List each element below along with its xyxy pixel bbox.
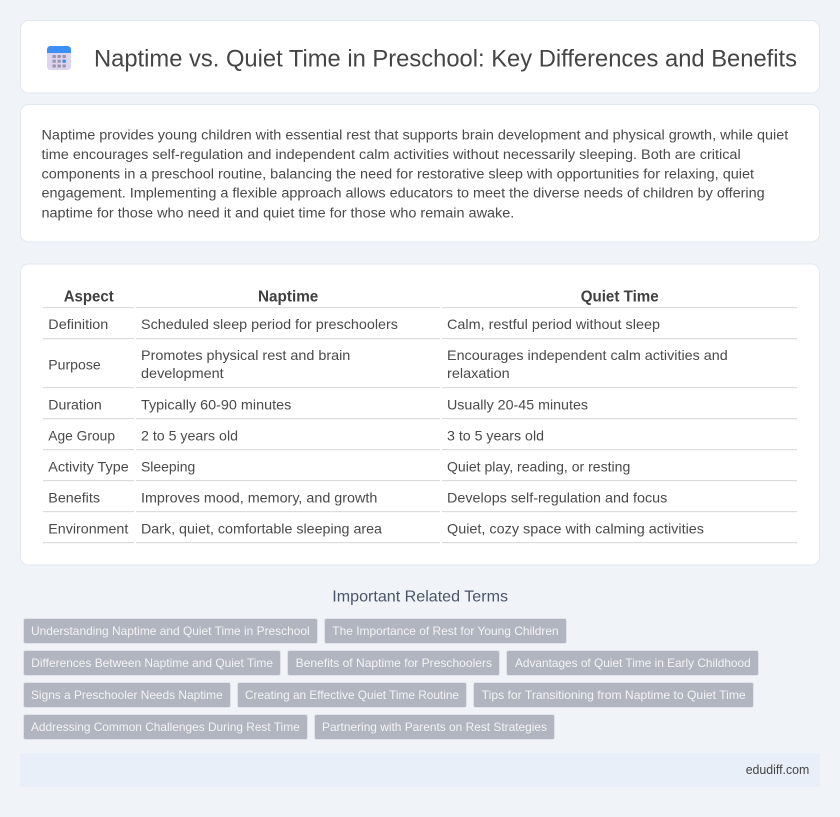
tag: Tips for Transitioning from Naptime to Quiet Time — [482, 688, 746, 702]
heading: important related terms: Important Related Terms — [332, 588, 508, 605]
tag — [314, 714, 554, 740]
panel: title header — [20, 20, 820, 93]
table header row — [43, 289, 797, 308]
table row: benefits — [43, 489, 797, 512]
text block: introduction paragraph: components in a preschool routine, balancing the need for restorative sleep with opportunities for relaxing, quiet — [42, 166, 754, 182]
table row: purpose: development — [141, 365, 224, 381]
tag — [24, 682, 230, 708]
table row: purpose: Promotes physical rest and brain — [141, 347, 350, 363]
table row: benefits: Benefits — [48, 489, 100, 505]
table header row: Aspect — [64, 289, 114, 306]
table row: definition: Scheduled sleep period for preschoolers — [141, 316, 398, 332]
table row: purpose: Encourages independent calm activities and — [447, 347, 728, 363]
title: Naptime vs. Quiet Time in Preschool: Key Differences and Benefits — [94, 46, 797, 73]
footer — [20, 753, 820, 787]
tag — [24, 650, 280, 676]
tag — [238, 682, 466, 708]
table row: activity type — [43, 458, 797, 481]
panel: comparison table — [20, 264, 820, 565]
text block: introduction paragraph: time encourages self-regulation and independent calm activities without necessarily sleeping. Both are critical — [42, 147, 741, 163]
table row: duration: Typically 60-90 minutes — [141, 396, 291, 412]
tag — [506, 650, 758, 676]
table row: age group — [43, 427, 797, 450]
tag: Creating an Effective Quiet Time Routine — [245, 688, 459, 702]
tag — [324, 618, 566, 644]
table row: definition: Definition — [48, 316, 108, 332]
table row: benefits: Improves mood, memory, and growth — [141, 489, 377, 505]
tag: Differences Between Naptime and Quiet Time — [31, 656, 273, 670]
table row: activity type: Activity Type — [48, 458, 129, 474]
table row: purpose: Purpose — [48, 356, 101, 372]
table row: purpose — [43, 347, 797, 388]
table row: activity type: Sleeping — [141, 458, 195, 474]
table row: environment — [43, 520, 797, 543]
tag: Addressing Common Challenges During Rest Time — [31, 720, 300, 734]
tag — [24, 618, 318, 644]
table row: environment: Quiet, cozy space with calming activities — [447, 520, 704, 536]
panel: related term tags — [24, 618, 758, 740]
icon: calendar — [47, 46, 71, 70]
panel: introduction — [20, 104, 820, 242]
tag — [288, 650, 500, 676]
table row: age group: 2 to 5 years old — [141, 427, 238, 443]
tag: Benefits of Naptime for Preschoolers — [296, 656, 492, 670]
table row: duration: Usually 20-45 minutes — [447, 396, 588, 412]
footer source text: edudiff.com — [746, 763, 809, 777]
text block: introduction paragraph — [42, 128, 788, 221]
text block: introduction paragraph: naptime for those who need it and quiet time for those who remain awake. — [42, 205, 514, 221]
tag: The Importance of Rest for Young Children — [332, 624, 559, 638]
table header row: Naptime — [258, 289, 319, 306]
table row: environment: Environment — [48, 520, 128, 536]
table row: age group: 3 to 5 years old — [447, 427, 544, 443]
tag: Advantages of Quiet Time in Early Childhood — [515, 656, 751, 670]
tag: Signs a Preschooler Needs Naptime — [31, 688, 223, 702]
table row: activity type: Quiet play, reading, or resting — [447, 458, 630, 474]
text block: introduction paragraph: engagement. Implementing a flexible approach allows educators to meet the diverse needs of children by offering — [42, 186, 765, 202]
table row: definition — [43, 316, 797, 339]
table row: benefits: Develops self-regulation and focus — [447, 489, 667, 505]
table row: definition: Calm, restful period without sleep — [447, 316, 660, 332]
table header row: Quiet Time — [581, 289, 659, 306]
table row: age group: Age Group — [48, 427, 115, 443]
text block: introduction paragraph: Naptime provides young children with essential rest that supports brain development and physical growth, while quiet — [42, 128, 788, 144]
table row: purpose: relaxation — [447, 365, 510, 381]
tag — [474, 682, 754, 708]
tag: Understanding Naptime and Quiet Time in Preschool — [31, 624, 310, 638]
table row: environment: Dark, quiet, comfortable sleeping area — [141, 520, 382, 536]
tag: Partnering with Parents on Rest Strategies — [322, 720, 547, 734]
table row: duration: Duration — [48, 396, 102, 412]
table row: duration — [43, 396, 797, 419]
tag — [24, 714, 308, 740]
